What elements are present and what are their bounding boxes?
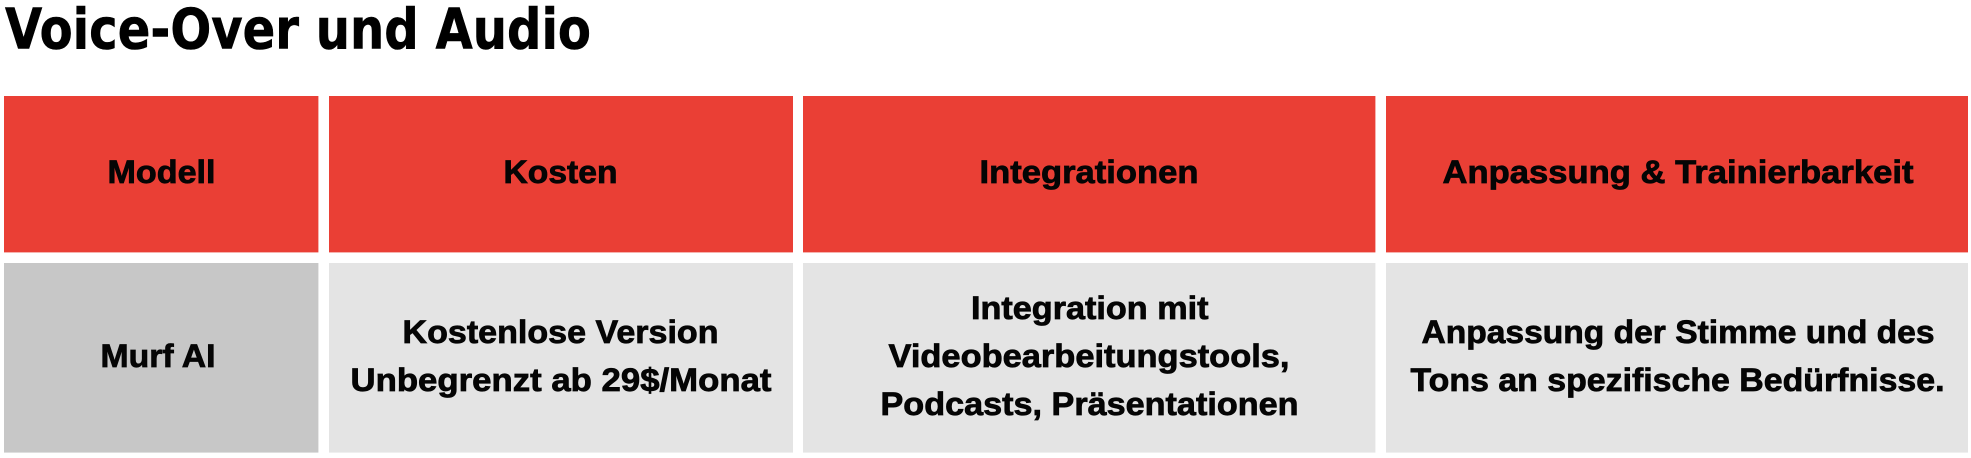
header cell: Integrationen xyxy=(803,96,1375,252)
row cell: Integrationen value: Integration mit xyxy=(971,290,1209,326)
row cell: Anpassung value xyxy=(1386,263,1968,453)
row cell: Kosten value: Kostenlose Version xyxy=(402,314,718,350)
row cell: Integrationen value: Videobearbeitungstools, xyxy=(888,338,1290,374)
header cell: Integrationen: Integrationen xyxy=(980,154,1198,190)
header cell: Kosten: Kosten xyxy=(504,154,618,190)
row cell: Kosten value: Unbegrenzt ab 29$/Monat xyxy=(350,362,772,398)
header cell: Kosten xyxy=(329,96,793,252)
row cell: Integrationen value: Podcasts, Präsentationen xyxy=(880,386,1298,422)
header cell: Anpassung und Trainierbarkeit: Anpassung & Trainierbarkeit xyxy=(1442,154,1914,190)
row cell: Anpassung value: Anpassung der Stimme und des xyxy=(1422,314,1934,350)
row cell: Kosten value xyxy=(329,263,793,453)
header cell: Modell: Modell xyxy=(108,154,216,190)
header cell: Modell xyxy=(4,96,318,252)
row cell: Anpassung value: Tons an spezifische Bedürfnisse. xyxy=(1410,362,1944,398)
header cell: Anpassung und Trainierbarkeit xyxy=(1386,96,1968,252)
row cell: Murf AI xyxy=(4,263,318,453)
row cell: Integrationen value xyxy=(803,263,1375,453)
row cell: Murf AI: Murf AI xyxy=(100,338,216,374)
